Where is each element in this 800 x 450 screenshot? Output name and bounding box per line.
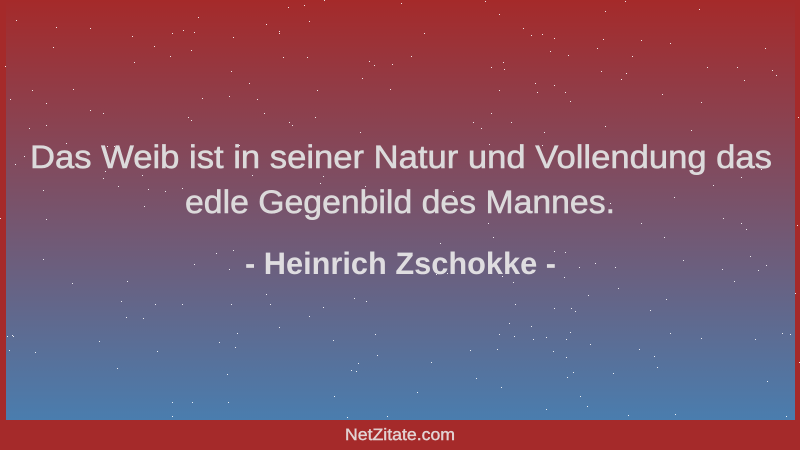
quote line 1: Das Weib ist in seiner Natur und Vollendung das	[30, 139, 772, 175]
footer brand: NetZitate.com: NetZitate.com	[345, 426, 455, 444]
quote text	[30, 139, 772, 220]
quote line 2: edle Gegenbild des Mannes.	[185, 184, 615, 220]
author attribution: - Heinrich Zschokke -	[245, 246, 556, 281]
